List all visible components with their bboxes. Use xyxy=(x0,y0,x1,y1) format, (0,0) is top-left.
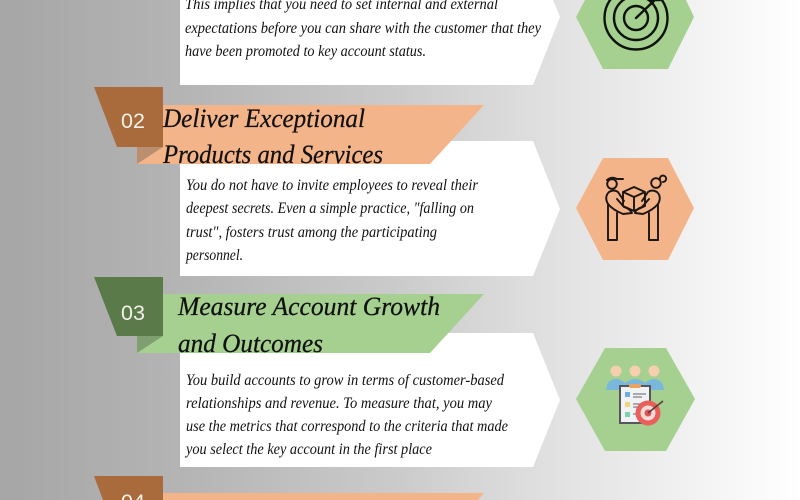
step 01 panel xyxy=(180,0,560,85)
icon: delivery handover hexagon xyxy=(576,158,694,260)
step 03 ribbon xyxy=(94,277,484,353)
step 02 heading: Products and Services xyxy=(162,140,383,169)
step 02 body text xyxy=(185,177,479,264)
step 03 number: 03 xyxy=(121,301,145,325)
step 02 heading: Deliver Exceptional xyxy=(162,104,365,133)
step 02 body text: You do not have to invite employees to reveal their xyxy=(186,177,479,194)
step 03 heading: and Outcomes xyxy=(178,329,323,358)
step 03 body text: use the metrics that correspond to the criteria that made xyxy=(186,418,508,435)
step 02 body text: personnel. xyxy=(185,247,243,264)
step 03 card xyxy=(180,333,560,467)
step 03 body text: You build accounts to grow in terms of customer-based xyxy=(186,372,504,389)
step 02 ribbon xyxy=(94,87,484,164)
step 01 card xyxy=(180,0,560,85)
step 03 heading xyxy=(177,292,440,358)
step 03 body text xyxy=(184,372,508,458)
step 01 body text: expectations before you can share with the customer that they xyxy=(185,20,541,37)
step 04 ribbon xyxy=(94,476,484,500)
step 02 heading xyxy=(162,104,383,169)
icon: team checklist target hexagon xyxy=(576,348,695,451)
step 01 body text xyxy=(185,0,541,60)
step 03 body text: relationships and revenue. To measure that, you may xyxy=(186,395,492,412)
icon: target hexagon xyxy=(576,0,694,69)
step 02 card xyxy=(180,141,560,276)
step 02 body text: deepest secrets. Even a simple practice, "falling on xyxy=(186,200,474,217)
step 01 body text: have been promoted to key account status. xyxy=(185,43,426,60)
step 02 body text: trust", fosters trust among the participating xyxy=(186,224,437,241)
step 03 heading: Measure Account Growth xyxy=(177,292,440,321)
step 03 body text: you select the key account in the first place xyxy=(184,441,432,458)
step 02 number: 02 xyxy=(121,109,145,133)
